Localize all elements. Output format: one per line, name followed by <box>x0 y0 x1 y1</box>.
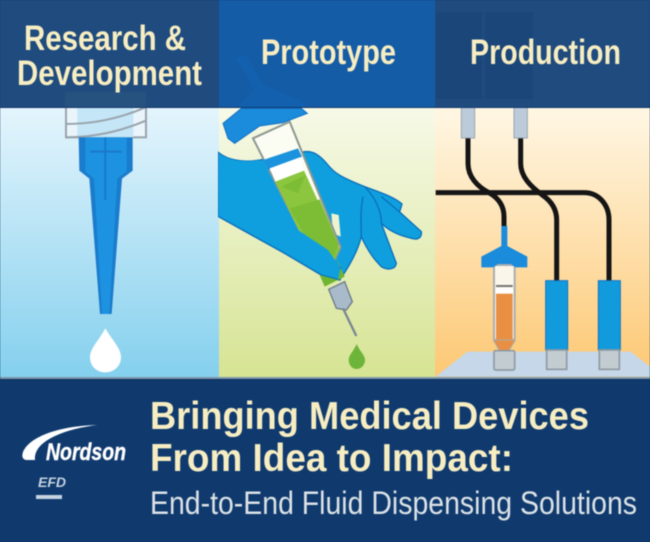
logo: Nordson EFD: Nordson <box>46 439 126 466</box>
heading: prototype: Prototype <box>261 33 396 72</box>
header band: research and development <box>0 0 219 108</box>
panel: production <box>435 0 650 379</box>
header band: production <box>435 0 650 108</box>
logo: Nordson EFD <box>22 425 126 499</box>
header band: prototype <box>219 0 435 108</box>
icon: production dispensing stations <box>436 107 650 377</box>
headline: Bringing Medical Devices <box>150 395 589 438</box>
icon: dispensing tip with droplet <box>66 93 146 372</box>
icon: gloved hand holding syringe <box>219 108 421 369</box>
logo: Nordson EFD: EFD <box>38 474 66 490</box>
heading: research and development: Development <box>17 54 202 93</box>
panel: prototype <box>219 0 435 379</box>
panel: research and development <box>0 0 219 379</box>
footer band <box>0 377 650 542</box>
heading: research and development: Research & <box>24 19 186 58</box>
headline: From Idea to Impact: <box>150 437 513 480</box>
heading: production: Production <box>470 33 621 72</box>
